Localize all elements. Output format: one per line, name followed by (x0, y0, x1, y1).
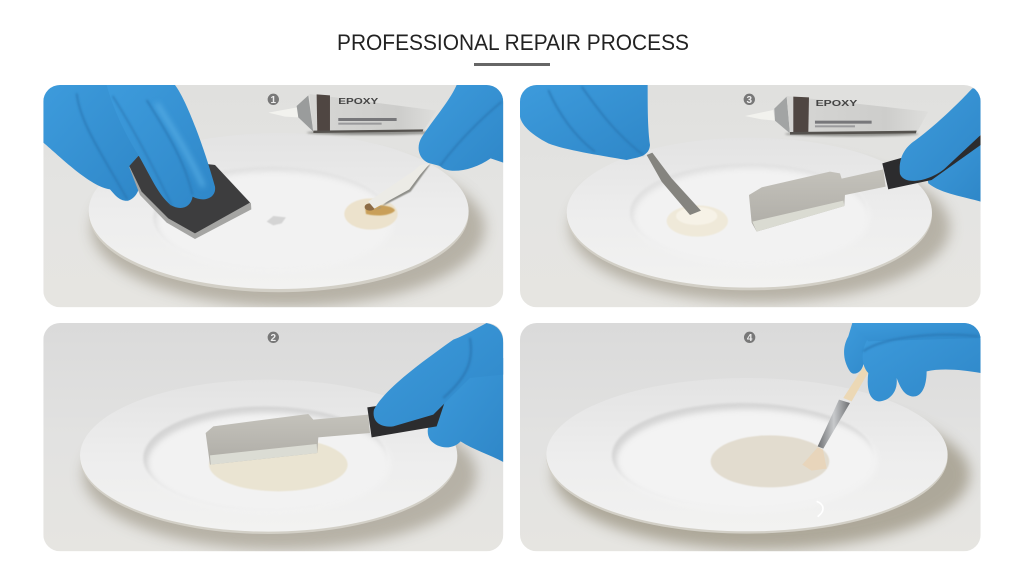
index finger (374, 323, 503, 427)
panel: step 3 mixing and spreading (520, 85, 981, 307)
step number 1: 1 (271, 95, 277, 106)
brush (802, 366, 868, 470)
rear finger of left glove (43, 85, 141, 201)
front fingers of left glove (77, 85, 215, 208)
step number 1 (268, 94, 279, 106)
panel: step 2 applying filler (43, 323, 503, 551)
title underline (474, 63, 550, 66)
step number 3: 3 (747, 95, 753, 106)
lower right finger (925, 137, 981, 202)
epoxy tube: EPOXY (338, 97, 379, 106)
sanding block (129, 156, 251, 239)
title: PROFESSIONAL REPAIR PROCESS (337, 30, 689, 55)
right glove (419, 85, 503, 171)
plate (563, 168, 956, 307)
filler blob (667, 205, 728, 237)
epoxy tube (268, 94, 437, 135)
panel: step 1 sanding and filling (43, 85, 503, 307)
plate (546, 404, 977, 552)
wide spatula (749, 135, 981, 232)
filler layer (209, 438, 348, 491)
small spatula (647, 153, 701, 215)
palm and thumb (428, 358, 503, 462)
repair blob (344, 198, 398, 230)
coating disc (711, 435, 829, 487)
epoxy tube (745, 96, 928, 136)
step number 2 (268, 332, 279, 344)
step number 4 (744, 332, 755, 344)
panel: step 4 finishing with brush (520, 323, 981, 551)
left glove (520, 85, 650, 160)
chip highlight (817, 501, 823, 517)
spatula (368, 163, 431, 210)
step number 2: 2 (271, 333, 277, 344)
sanded mark (267, 216, 286, 225)
epoxy tube: EPOXY (816, 99, 858, 108)
plate (85, 172, 492, 308)
step number 4: 4 (747, 333, 753, 344)
spatula (206, 404, 444, 465)
glove fingers (852, 323, 981, 401)
plate (76, 408, 484, 552)
thumb (844, 323, 867, 374)
step number 3 (744, 94, 755, 106)
right glove index finger (900, 88, 981, 181)
